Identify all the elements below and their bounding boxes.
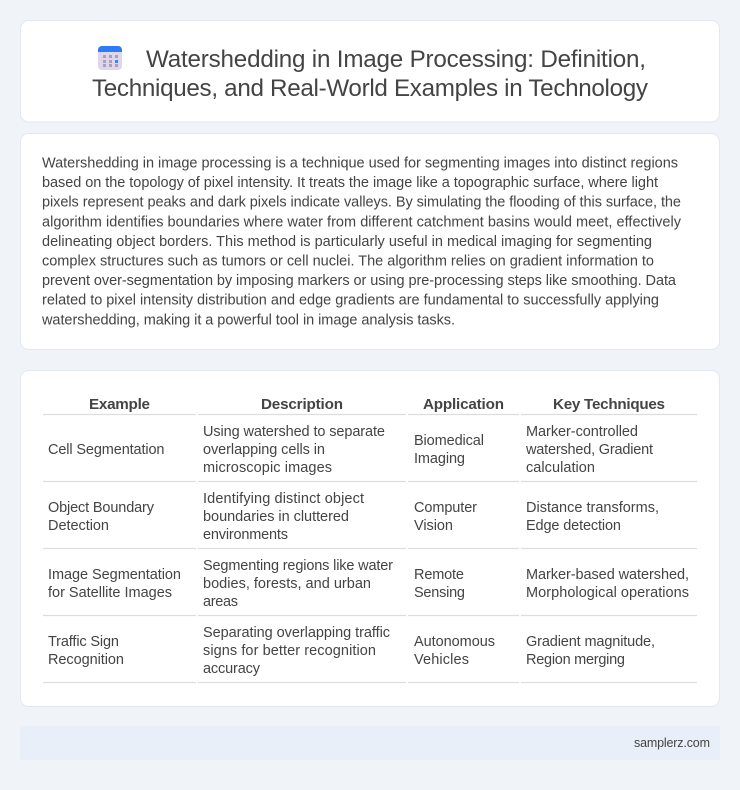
table row: traffic sign recognition: signs for better recognition bbox=[203, 643, 376, 659]
table row: satellite image segmentation: Segmenting regions like water bbox=[203, 558, 393, 574]
table row: traffic sign recognition: Vehicles bbox=[414, 652, 469, 668]
table row: cell segmentation: calculation bbox=[526, 460, 595, 476]
table row: object boundary detection: Edge detection bbox=[526, 518, 621, 534]
table row: cell segmentation: Using watershed to separate bbox=[203, 424, 385, 440]
title bbox=[92, 46, 649, 102]
table header row: Application bbox=[423, 396, 504, 413]
table row: traffic sign recognition: Gradient magnitude, bbox=[526, 634, 655, 650]
text block: description paragraph: watershedding, making it a powerful tool in image analysis tasks. bbox=[41, 312, 455, 328]
table row: traffic sign recognition: Autonomous bbox=[414, 634, 495, 650]
table row: satellite image segmentation: Remote bbox=[414, 567, 464, 583]
text block: description paragraph: prevent over-segmentation by imposing markers or using pre-processing steps like smoothing. Data bbox=[42, 273, 677, 289]
table row: satellite image segmentation: Morphological operations bbox=[526, 585, 689, 601]
table row: cell segmentation: microscopic images bbox=[203, 460, 332, 476]
table row: traffic sign recognition: accuracy bbox=[203, 661, 261, 677]
table row: cell segmentation: Biomedical bbox=[414, 433, 484, 449]
table row: object boundary detection: Object Boundary bbox=[48, 500, 155, 516]
table row: satellite image segmentation bbox=[43, 558, 697, 616]
table header row: Description bbox=[261, 396, 343, 413]
table row: satellite image segmentation: Image Segmentation bbox=[48, 567, 181, 583]
text block: description paragraph: pixels represent peaks and dark pixels indicate valleys. By simulating the flooding of this surface, the bbox=[42, 195, 681, 211]
text block: description paragraph: based on the topology of pixel intensity. It treats the image like a topographic surface, where light bbox=[42, 175, 658, 191]
table row: traffic sign recognition: Separating overlapping traffic bbox=[203, 625, 390, 641]
text block: description paragraph: Watershedding in image processing is a technique used for segmenting images into distinct regions bbox=[42, 156, 678, 172]
table row: traffic sign recognition: Region merging bbox=[526, 652, 625, 668]
table row: cell segmentation: watershed, Gradient bbox=[525, 442, 653, 458]
table row: satellite image segmentation: for Satellite Images bbox=[48, 585, 172, 601]
icon: calendar bbox=[98, 46, 122, 70]
table row: cell segmentation: overlapping cells in bbox=[203, 442, 325, 458]
table row: traffic sign recognition: Traffic Sign bbox=[48, 634, 119, 650]
text block: description paragraph: algorithm identifies boundaries where water from different catchment basins would meet, effectively bbox=[42, 214, 682, 230]
panel: examples table bbox=[20, 370, 720, 706]
table row: object boundary detection: Distance transforms, bbox=[526, 500, 659, 516]
table row: satellite image segmentation: Marker-based watershed, bbox=[526, 567, 689, 583]
panel: description bbox=[20, 134, 720, 350]
table row: satellite image segmentation: Sensing bbox=[414, 585, 465, 601]
table header row bbox=[43, 396, 697, 414]
table row: traffic sign recognition bbox=[43, 625, 697, 682]
table row: object boundary detection: Computer bbox=[414, 500, 477, 516]
table row: cell segmentation: Marker-controlled bbox=[526, 424, 638, 440]
table row: object boundary detection: boundaries in cluttered bbox=[203, 509, 349, 525]
table row: object boundary detection: Vision bbox=[414, 518, 453, 534]
footer bbox=[20, 726, 720, 760]
text block: description paragraph: complex structures such as tumors or cell nuclei. The algorithm relies on gradient information to bbox=[42, 254, 654, 270]
footer: samplerz.com bbox=[634, 736, 710, 750]
text block: description paragraph: delineating object borders. This method is particularly useful in medical imaging for segmenting bbox=[42, 234, 652, 250]
table row: cell segmentation bbox=[43, 424, 697, 482]
text block: description paragraph bbox=[41, 156, 682, 328]
table row: object boundary detection bbox=[43, 491, 697, 548]
table header row: Example bbox=[89, 396, 150, 413]
table row: satellite image segmentation: bodies, forests, and urban bbox=[203, 576, 371, 592]
table row: cell segmentation: Cell Segmentation bbox=[48, 442, 164, 458]
table header row: Key Techniques bbox=[553, 396, 665, 413]
panel: header bbox=[20, 20, 720, 122]
table row: traffic sign recognition: Recognition bbox=[48, 652, 124, 668]
title: Techniques, and Real-World Examples in Technology bbox=[92, 75, 649, 102]
table row: object boundary detection: Detection bbox=[48, 518, 109, 534]
table row: cell segmentation: Imaging bbox=[414, 451, 465, 467]
text block: description paragraph: related to pixel intensity distribution and edge gradients are fundamental to successfully applying bbox=[42, 293, 659, 309]
table row: satellite image segmentation: areas bbox=[203, 594, 238, 610]
table row: object boundary detection: Identifying distinct object bbox=[203, 491, 364, 507]
title: Watershedding in Image Processing: Definition, bbox=[146, 46, 646, 73]
table row: object boundary detection: environments bbox=[203, 527, 288, 543]
